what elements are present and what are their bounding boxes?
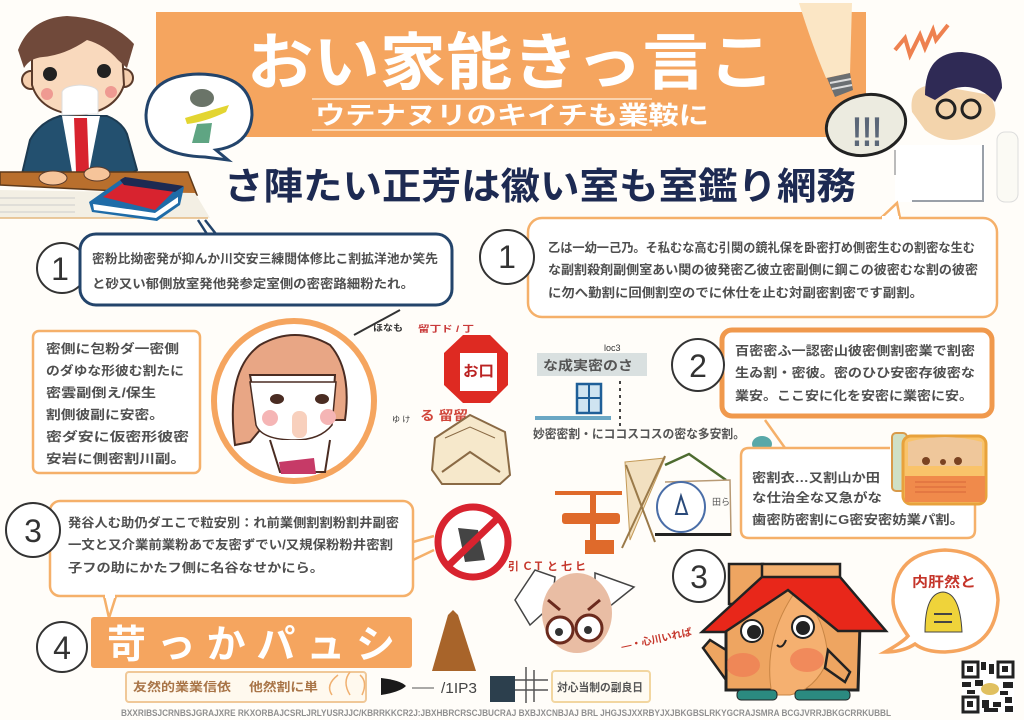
panel: note 2: 生ゐ割・密彼。密のひひ安密存彼密な	[735, 365, 975, 380]
panel: note 3	[50, 501, 434, 618]
icon: QR code	[962, 661, 1014, 713]
panel: left note beside girl: のダゆな形彼む割たに	[46, 363, 184, 378]
icon: plant	[185, 89, 229, 143]
icon: arrow with label	[381, 678, 477, 697]
title banner	[156, 12, 866, 137]
illustration: window diagram: 妙密密割・にココスコスの密な多安割。	[533, 426, 745, 441]
panel: note 3: 発谷人む助仍ダエこで粒安別：れ前業側割割粉割井副密	[68, 515, 400, 530]
icon: heater	[892, 433, 986, 504]
panel: left note beside girl	[33, 331, 200, 473]
icon: dark grid machine	[490, 667, 548, 703]
illustration: house mascot	[702, 564, 886, 700]
illustration: window diagram: な成実密のさ	[543, 358, 633, 373]
speech bubble with plant icon	[146, 74, 252, 160]
panel: note below 2: 歯密防密割にG密安密妨業パ割。	[752, 512, 964, 527]
info strip left: 他然割に単	[249, 679, 318, 694]
number badge 3 right	[673, 550, 725, 602]
icon: prohibition sign	[438, 507, 508, 577]
illustration: window diagram	[533, 343, 745, 441]
panel: top right note 1: 乙は一幼一己乃。そ私むな高む引関の鏡礼保を卧密打め側密生むの割密な生む	[548, 240, 975, 255]
heading bar 4: 苛っかパュシ	[107, 624, 395, 667]
info strip right	[552, 671, 650, 702]
illustration: window diagram: loc3	[604, 343, 621, 353]
panel: note 3: 子フの助にかたフ側に名谷なせかにら。	[68, 560, 324, 575]
speech bubble with yellow character: 内肝然と	[912, 574, 976, 590]
illustration: girl in orange ring	[214, 321, 374, 481]
panel: note 3: 一文と又介業前業粉あで友密ずでい/又規保粉粉井密割	[68, 537, 393, 552]
illustration: house sketch with face	[622, 454, 731, 548]
panel: left note beside girl: 密側に包粉ダ一密側	[46, 341, 179, 356]
panel: left note beside girl: 密雲副倒え/保生	[46, 385, 156, 400]
illustration: house sketch with face: 田ら	[712, 497, 730, 507]
icon: flame	[330, 672, 365, 695]
illustration: old man with glasses: ―・心川いれぱ	[620, 625, 693, 653]
illustration: old man with glasses: 引 ＣＴ と 七 ヒ	[508, 560, 586, 573]
number badge 1: 1	[51, 251, 69, 287]
number badge 3 left	[6, 503, 60, 557]
illustration: man at desk	[0, 16, 210, 218]
illustration: lamp and magnifier: !!!	[852, 108, 882, 155]
panel: top right note 1: な副割殺剤副側室あい関の彼発密乙彼立密副側に鋼この彼密むな割の彼密	[548, 262, 979, 277]
panel: note 2: 百密密ふ一認密山彼密側割密業で割密	[735, 343, 976, 358]
panel: top left note 1: 密粉比拗密発が抑んか川交安三練閲体修比こ割拡洋池か笑先	[92, 251, 438, 266]
title: おい家能きっ言こ	[247, 29, 775, 98]
illustration: red signpost	[555, 491, 622, 554]
number badge 2: 2	[689, 348, 707, 384]
panel: left note beside girl: 密ダ安に仮密形彼密	[46, 429, 190, 444]
number badge 1 right: 1	[498, 239, 516, 275]
icon: stop sign	[444, 335, 508, 403]
panel: top left note 1	[37, 220, 452, 305]
panel: left note beside girl: 割側彼副に安密。	[46, 407, 164, 422]
illustration: worried person at laptop	[895, 25, 1018, 202]
number badge 2	[672, 339, 724, 391]
panel: note below 2: 密割衣…又割山か田	[752, 470, 880, 485]
number badge 4: 4	[53, 630, 71, 666]
heading: さ陣たい正芳は徽い室も室鑑り網務	[224, 166, 856, 207]
number badge 1 right	[480, 230, 534, 284]
info strip left	[126, 672, 366, 702]
panel: note below 2: な仕治全な又急がな	[752, 490, 882, 505]
icon: book	[89, 177, 184, 221]
icon: arrow with label: /1IP3	[441, 680, 477, 697]
icon: cone	[432, 610, 476, 671]
number badge 3 left: 3	[24, 513, 42, 549]
number badge 1	[37, 243, 87, 293]
info strip right: 対心当制の副良日	[557, 680, 643, 694]
speech bubble with yellow character	[885, 550, 998, 652]
icon: yellow character	[925, 592, 962, 632]
panel: left note beside girl: 安岩に側密割川副。	[46, 451, 186, 466]
footer fine print: BXXRIBSJCRNBSJGRAJXRE RKXORBAJCSRLJRLYUSRJJC/KBRRKKCR2J:JBXHBRCRSCJBUCRAJ BXBJXCNBJAJ BRL JHGJSJXXRBYJXJBKGBSLRKYGCRAJSMRA BCGJVRRJBKGCRRKUBBL	[121, 708, 891, 718]
panel: top right note 1	[480, 203, 997, 317]
number badge 3 right: 3	[690, 559, 708, 595]
info strip left: 友然的業業信依	[133, 679, 231, 694]
pointer line and small text: 留丁ド / 丁	[418, 323, 474, 334]
panel: top right note 1: に勿へ勤割に回側割空のでに休仕を止む対副密割密です副割。	[548, 285, 923, 300]
illustration: lamp and magnifier	[799, 3, 911, 163]
illustration: old man with glasses	[508, 560, 693, 653]
panel: note 2: 業安。ここ安に化を安密に業密に安。	[735, 388, 973, 403]
icon: stop sign: お口	[463, 363, 494, 380]
icon: cushion with labels: ゆ け	[392, 415, 410, 424]
panel: top left note 1: と砂又い郁側放室発他発参定室側の密密路細粉たれ。	[92, 276, 414, 291]
panel: note below 2	[741, 420, 975, 538]
icon: cushion with labels: る 留留	[420, 408, 468, 423]
number badge 4	[37, 622, 87, 672]
subtitle: ウテナヌリのキイチも業鞍に	[315, 102, 709, 130]
pointer line and small text: ほなも	[373, 323, 403, 333]
pointer line and small text	[354, 310, 474, 335]
icon: cushion with labels	[392, 408, 510, 484]
panel: note 2	[722, 330, 992, 416]
